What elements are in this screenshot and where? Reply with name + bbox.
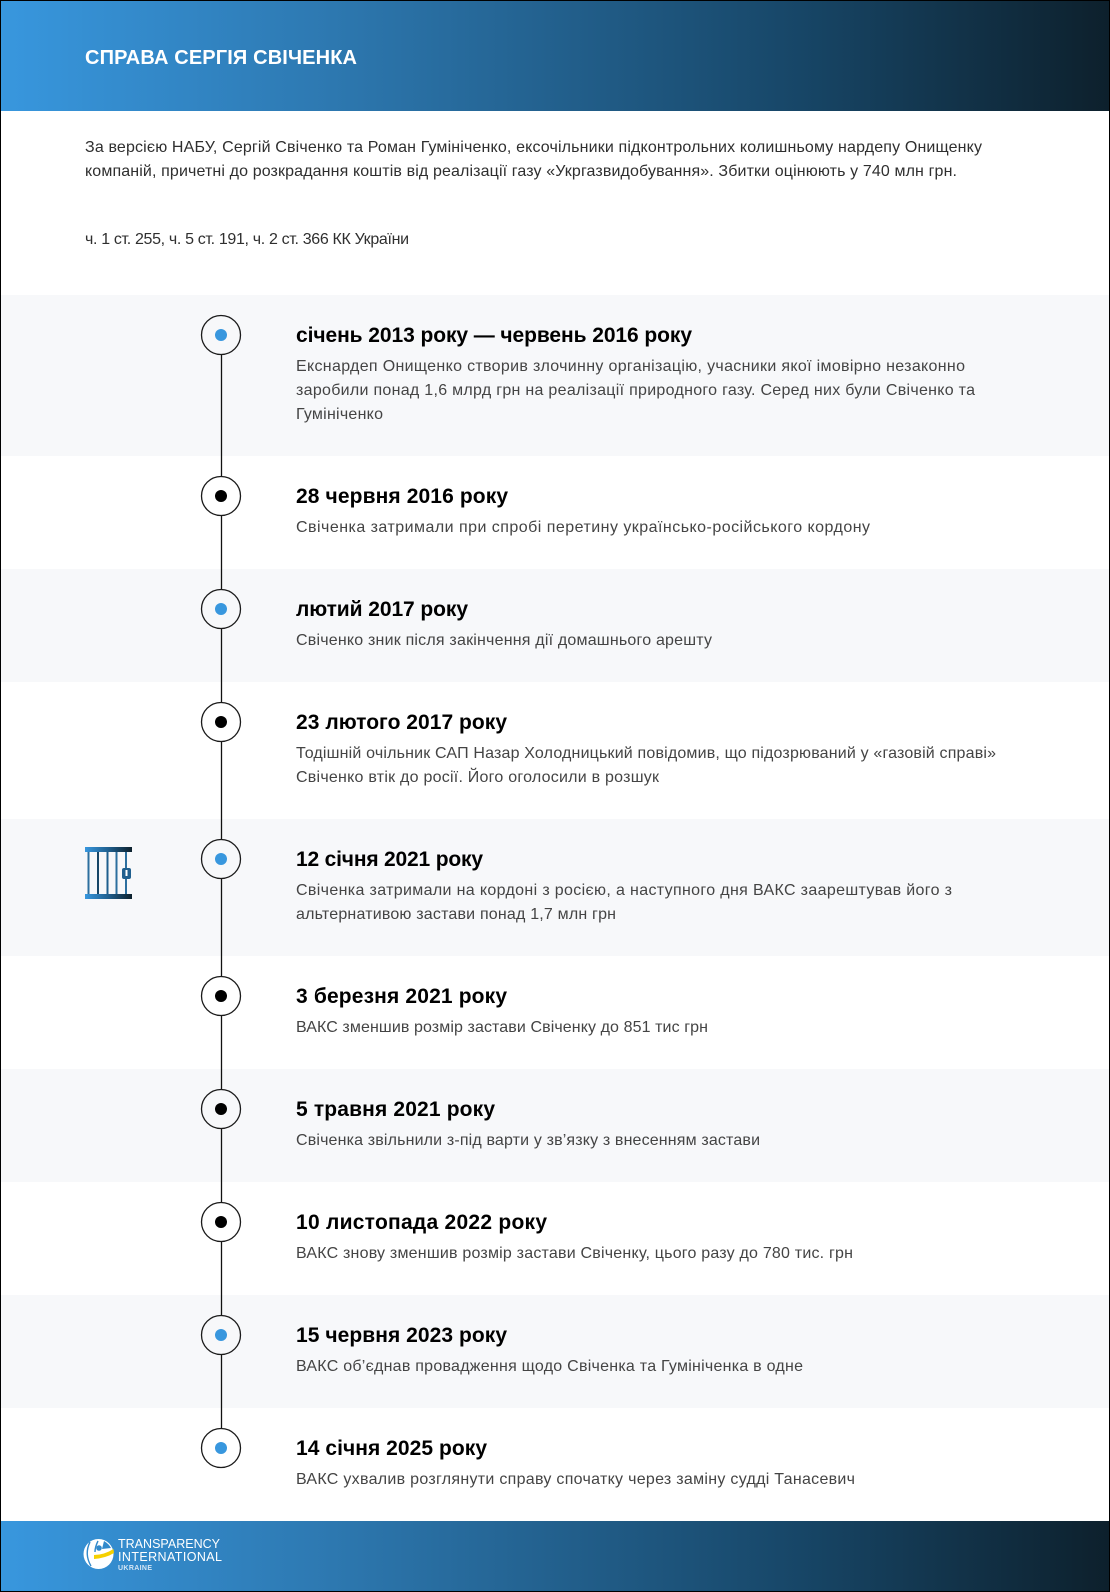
event: січень 2013: Гумініченко (296, 406, 383, 423)
event: 15 червня 2023 (202, 1316, 803, 1375)
event: 28 червня 2016 (202, 476, 870, 536)
row backgrounds (0, 295, 1110, 1408)
logo: Transparency International Ukraine: TRANSPARENCY (118, 1537, 221, 1551)
event: січень 2013: Екснардеп Онищенко створив злочинну організацію, учасники якої імовірно незаконно (296, 358, 965, 375)
event: 12 січня 2021 (202, 840, 952, 923)
event: лютий 2017: Свіченко зник після закінчення дії домашнього арешту (296, 632, 712, 649)
event: січень 2013 (202, 316, 975, 423)
logo: Transparency International Ukraine: INTERNATIONAL (118, 1550, 222, 1564)
event: 12 січня 2021: альтернативою застави понад 1,7 млн грн (296, 906, 616, 923)
event: 5 травня 2021 (202, 1090, 760, 1149)
title: СПРАВА СЕРГІЯ СВІЧЕНКА (85, 47, 357, 69)
event: січень 2013: січень 2013 року — червень 2016 року (296, 324, 692, 347)
event: 14 січня 2025: 14 січня 2025 року (296, 1437, 487, 1460)
event: 12 січня 2021: Свіченка затримали на кордоні з росією, а наступного дня ВАКС заарештував його з (296, 882, 952, 899)
event: 10 листопада 2022: 10 листопада 2022 року (296, 1211, 547, 1234)
event: лютий 2017: лютий 2017 року (296, 598, 468, 621)
event: 5 травня 2021: 5 травня 2021 року (296, 1098, 495, 1121)
logo: Transparency International Ukraine (84, 1537, 222, 1572)
legal articles: ч. 1 ст. 255, ч. 5 ст. 191, ч. 2 ст. 366 КК України (85, 231, 409, 248)
event: 23 лютого 2017: Свіченко втік до росії. Його оголосили в розшук (296, 767, 660, 786)
timeline line (220, 335, 222, 1448)
event: 23 лютого 2017: 23 лютого 2017 року (296, 711, 507, 734)
icon: prison bars (85, 847, 132, 899)
intro text: компаній, причетні до розкрадання коштів від реалізації газу «Укргазвидобування». Збитки оцінюють у 740 млн грн. (85, 163, 957, 180)
event: 12 січня 2021: 12 січня 2021 року (296, 848, 483, 871)
event: 10 листопада 2022 (202, 1202, 853, 1262)
event: 23 лютого 2017 (202, 702, 996, 786)
event: 10 листопада 2022: ВАКС знову зменшив розмір застави Свіченку, цього разу до 780 тис. грн (296, 1245, 853, 1262)
event: лютий 2017 (202, 590, 712, 649)
event: 28 червня 2016: Свіченка затримали при спробі перетину українсько-російського кордону (296, 519, 870, 536)
event: 3 березня 2021: 3 березня 2021 року (296, 985, 507, 1008)
header banner (0, 0, 1110, 111)
event: 3 березня 2021: ВАКС зменшив розмір застави Свіченку до 851 тис грн (296, 1019, 708, 1036)
intro text: За версією НАБУ, Сергій Свіченко та Роман Гумініченко, ексочільники підконтрольних колишньому нардепу Онищенку (85, 139, 982, 156)
event: 3 березня 2021 (202, 976, 708, 1036)
event: 14 січня 2025 (202, 1428, 855, 1488)
event: 15 червня 2023: 15 червня 2023 року (296, 1324, 507, 1347)
footer banner (0, 1521, 1110, 1592)
event: 5 травня 2021: Свіченка звільнили з-під варти у зв’язку з внесенням застави (296, 1132, 760, 1149)
event: 23 лютого 2017: Тодішній очільник САП Назар Холодницький повідомив, що підозрюваний у «газовій справі» (296, 745, 996, 762)
event: 28 червня 2016: 28 червня 2016 року (296, 485, 508, 508)
event: 14 січня 2025: ВАКС ухвалив розглянути справу спочатку через заміну судді Танасевич (296, 1471, 855, 1488)
event: 15 червня 2023: ВАКС об’єднав провадження щодо Свіченка та Гумініченка в одне (296, 1358, 803, 1375)
logo: Transparency International Ukraine: UKRAINE (118, 1565, 152, 1572)
intro text (85, 139, 982, 180)
event: січень 2013: заробили понад 1,6 млрд грн на реалізації природного газу. Серед них були Свіченко та (296, 382, 975, 399)
